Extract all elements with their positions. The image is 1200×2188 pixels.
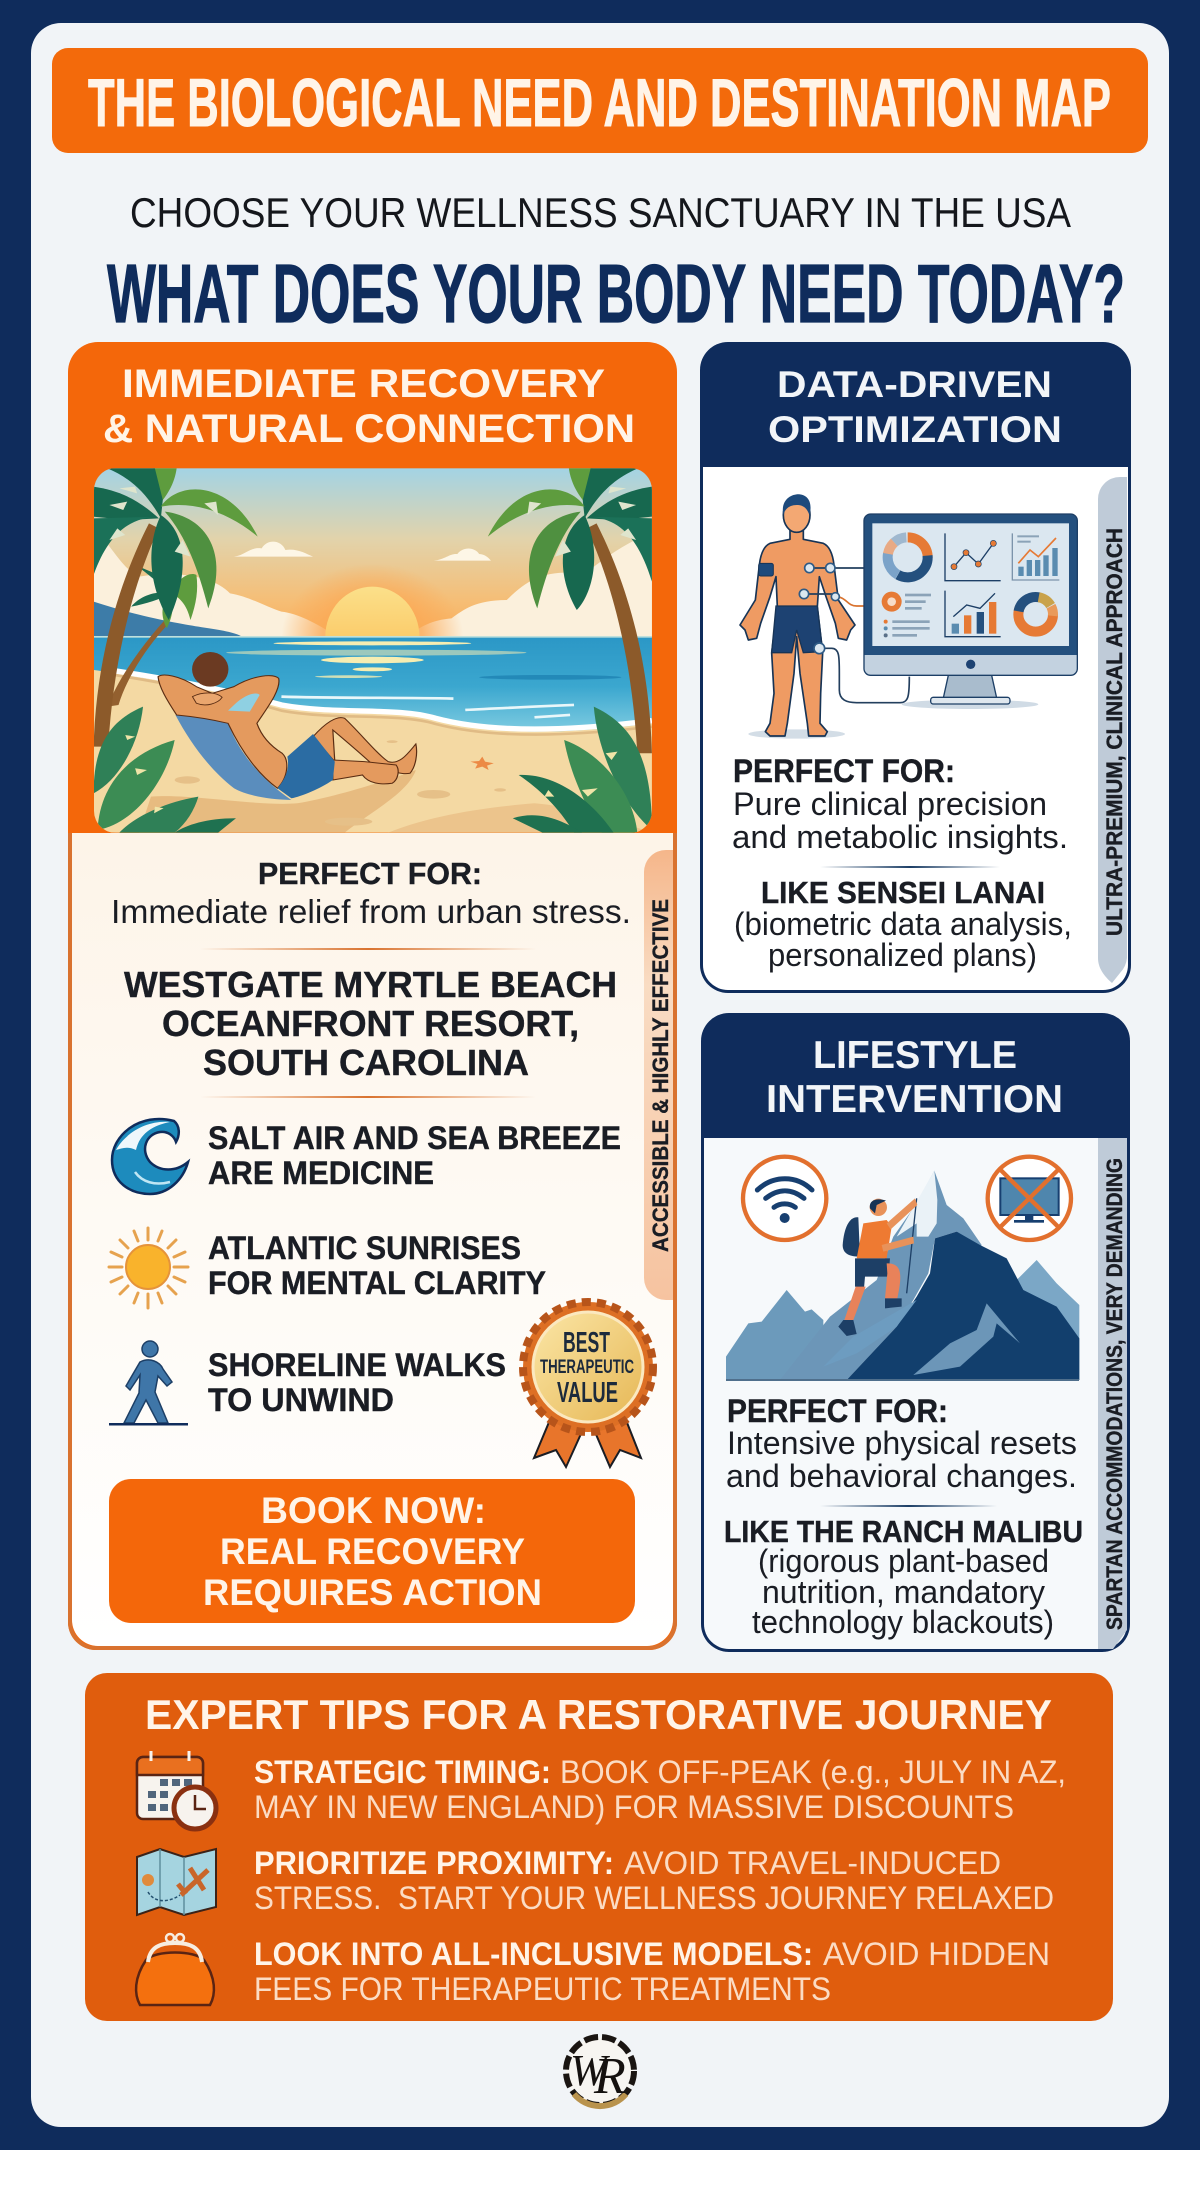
illustration: climber on mountain bbox=[726, 1157, 1079, 1380]
text: like the ranch malibu: LIKE THE RANCH MALIBU bbox=[724, 1514, 1083, 1549]
icon: coin purse bbox=[136, 1934, 214, 2005]
illustration: man relaxing on a beach at sunset bbox=[94, 468, 652, 833]
panel heading: immediate recovery: & NATURAL CONNECTION bbox=[103, 407, 635, 451]
panel: expert tips bbox=[85, 1673, 1113, 2021]
tip: all-inclusive models: FEES FOR THERAPEUTIC TREATMENTS bbox=[254, 1971, 831, 2007]
tip: all-inclusive models: AVOID HIDDEN bbox=[823, 1936, 1050, 1972]
icon: wave bbox=[112, 1119, 188, 1194]
side tab: spartan accommodations: SPARTAN ACCOMMODATIONS, VERY DEMANDING bbox=[1102, 1158, 1127, 1630]
benefit: salt air: ARE MEDICINE bbox=[208, 1155, 434, 1191]
subtitle: CHOOSE YOUR WELLNESS SANCTUARY IN THE USA bbox=[130, 189, 1071, 236]
starfish bbox=[470, 757, 494, 770]
destination name: SOUTH CAROLINA bbox=[203, 1042, 529, 1083]
panel heading: lifestyle: INTERVENTION bbox=[766, 1078, 1063, 1121]
tip: all-inclusive models bbox=[136, 1934, 1050, 2007]
benefit: shoreline walks: TO UNWIND bbox=[208, 1382, 394, 1418]
badge: best therapeutic value: THERAPEUTIC bbox=[540, 1357, 634, 1378]
benefit: atlantic sunrises bbox=[109, 1228, 546, 1308]
icon: crossed-out screen bbox=[988, 1157, 1071, 1240]
destination name: OCEANFRONT RESORT, bbox=[162, 1003, 579, 1044]
computer monitor with charts bbox=[864, 514, 1077, 709]
text: perfect for: and behavioral changes. bbox=[726, 1458, 1077, 1494]
benefit: salt air bbox=[112, 1119, 621, 1194]
text: like the ranch malibu bbox=[724, 1514, 1083, 1640]
panel heading: immediate recovery: IMMEDIATE RECOVERY bbox=[122, 362, 605, 406]
text: perfect for bbox=[732, 753, 1068, 855]
call to action button bbox=[109, 1479, 635, 1623]
text: like the ranch malibu: (rigorous plant-based bbox=[758, 1543, 1049, 1579]
text: perfect for: Intensive physical resets bbox=[727, 1425, 1077, 1461]
text: perfect for: PERFECT FOR: bbox=[258, 856, 482, 891]
panel: lifestyle intervention bbox=[701, 1013, 1130, 1652]
panel heading: data-driven: DATA-DRIVEN bbox=[777, 364, 1052, 405]
benefit: salt air: SALT AIR AND SEA BREEZE bbox=[208, 1120, 621, 1156]
man with sensors bbox=[740, 494, 909, 739]
text: perfect for: PERFECT FOR: bbox=[733, 753, 955, 789]
benefit: shoreline walks: SHORELINE WALKS bbox=[208, 1347, 506, 1383]
panel heading: lifestyle bbox=[766, 1034, 1063, 1121]
icon: map with plane bbox=[137, 1849, 216, 1915]
call to action button: BOOK NOW: bbox=[261, 1490, 486, 1531]
tip: prioritize proximity: AVOID TRAVEL-INDUCED bbox=[624, 1845, 1001, 1881]
panel heading: data-driven: OPTIMIZATION bbox=[768, 409, 1062, 450]
tip: prioritize proximity: STRESS. START YOUR WELLNESS JOURNEY RELAXED bbox=[254, 1880, 1054, 1916]
logo: WR wreath: W bbox=[570, 2046, 610, 2095]
icon: walking person bbox=[109, 1341, 188, 1426]
call to action button: REAL RECOVERY bbox=[220, 1531, 525, 1572]
panel heading: immediate recovery bbox=[103, 362, 635, 451]
tip: strategic timing: BOOK OFF-PEAK (e.g., JULY IN AZ, bbox=[560, 1754, 1066, 1790]
palm left and mirrored palm right bbox=[94, 468, 258, 747]
text: perfect for: PERFECT FOR: bbox=[727, 1393, 948, 1429]
mountains bbox=[726, 1171, 1079, 1380]
tip: all-inclusive models: LOOK INTO ALL-INCLUSIVE MODELS: bbox=[254, 1936, 813, 1972]
tip: prioritize proximity bbox=[137, 1845, 1054, 1916]
text: like sensei lanai: LIKE SENSEI LANAI bbox=[761, 875, 1045, 910]
side tab: ultra-premium: ULTRA-PREMIUM, CLINICAL APPROACH bbox=[1102, 528, 1127, 936]
tips heading: EXPERT TIPS FOR A RESTORATIVE JOURNEY bbox=[145, 1691, 1052, 1738]
small back palm bbox=[107, 565, 197, 707]
icon: sun bbox=[109, 1228, 188, 1308]
title banner bbox=[52, 48, 1148, 153]
text: perfect for: Pure clinical precision bbox=[733, 786, 1047, 822]
benefit: atlantic sunrises: FOR MENTAL CLARITY bbox=[208, 1265, 546, 1301]
text: perfect for: and metabolic insights. bbox=[732, 819, 1068, 855]
panel: data-driven optimization bbox=[700, 342, 1131, 993]
text: perfect for: Immediate relief from urban stress. bbox=[111, 893, 631, 930]
icon: wifi in orange ring bbox=[743, 1157, 826, 1240]
tip: prioritize proximity: PRIORITIZE PROXIMITY: bbox=[254, 1845, 614, 1881]
icon: calendar and clock bbox=[137, 1751, 216, 1829]
benefit: shoreline walks bbox=[109, 1341, 506, 1426]
logo: WR wreath: R bbox=[593, 2048, 626, 2105]
panel: immediate recovery bbox=[68, 342, 677, 1650]
badge: best therapeutic value: VALUE bbox=[557, 1377, 618, 1409]
tip: strategic timing bbox=[137, 1751, 1066, 1829]
side tab: accessible and highly effective: ACCESSIBLE & HIGHLY EFFECTIVE bbox=[648, 899, 673, 1252]
panel heading: data-driven bbox=[768, 364, 1062, 450]
tip: strategic timing: STRATEGIC TIMING: bbox=[254, 1754, 551, 1790]
text: like the ranch malibu: technology blackouts) bbox=[752, 1604, 1054, 1640]
text: like sensei lanai bbox=[734, 875, 1072, 973]
badge: best therapeutic value bbox=[523, 1302, 653, 1467]
logo: WR wreath bbox=[566, 2037, 634, 2106]
badge: best therapeutic value: BEST bbox=[563, 1327, 610, 1359]
destination name bbox=[124, 964, 617, 1083]
climber bbox=[838, 1198, 917, 1336]
benefit: atlantic sunrises: ATLANTIC SUNRISES bbox=[208, 1230, 521, 1266]
panel heading: lifestyle: LIFESTYLE bbox=[813, 1034, 1017, 1077]
destination name: WESTGATE MYRTLE BEACH bbox=[124, 964, 617, 1005]
foreground leaves bbox=[94, 707, 652, 833]
tip: strategic timing: MAY IN NEW ENGLAND) FOR MASSIVE DISCOUNTS bbox=[254, 1789, 1014, 1825]
man on lounge chair bbox=[158, 652, 417, 800]
text: perfect for bbox=[726, 1393, 1077, 1494]
text: like sensei lanai: personalized plans) bbox=[768, 937, 1037, 973]
text: perfect for bbox=[111, 856, 631, 930]
text: like the ranch malibu: nutrition, mandatory bbox=[762, 1574, 1045, 1610]
call to action button: REQUIRES ACTION bbox=[203, 1572, 542, 1613]
illustration: body sensors linked to monitor bbox=[740, 494, 1077, 739]
text: like sensei lanai: (biometric data analysis, bbox=[734, 906, 1072, 942]
